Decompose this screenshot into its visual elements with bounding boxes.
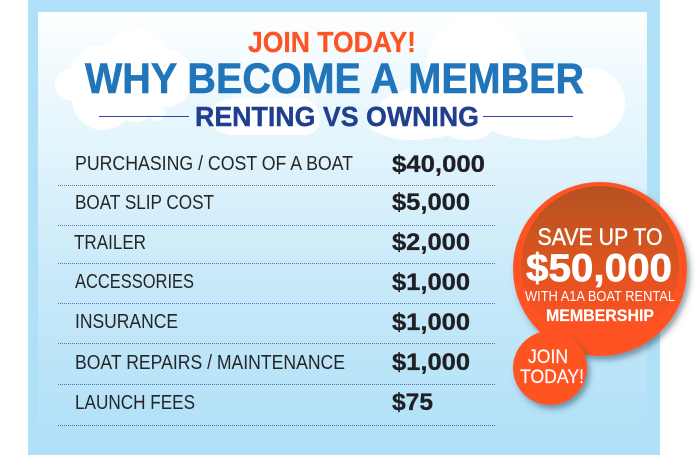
button: join today bbox=[513, 331, 587, 405]
row: accessories: ACCESSORIES bbox=[75, 271, 194, 293]
row: insurance: INSURANCE bbox=[75, 311, 178, 333]
badge: save up to $50,000: $50,000 bbox=[526, 247, 672, 290]
row: trailer bbox=[74, 229, 470, 256]
badge: save up to $50,000: MEMBERSHIP bbox=[546, 307, 654, 325]
row: purchasing: $40,000 bbox=[392, 151, 485, 178]
button: join today: JOIN bbox=[528, 347, 568, 368]
row: purchasing bbox=[75, 151, 485, 178]
subheading: renting vs owning: RENTING VS OWNING bbox=[195, 101, 479, 132]
row: accessories: $1,000 bbox=[392, 269, 470, 296]
heading: why become a member: WHY BECOME A MEMBER bbox=[85, 55, 584, 103]
row: boat repairs: BOAT REPAIRS / MAINTENANCE bbox=[75, 352, 345, 374]
row: boat slip: $5,000 bbox=[392, 189, 470, 216]
title: join today: JOIN TODAY! bbox=[248, 27, 416, 59]
row: purchasing: PURCHASING / COST OF A BOAT bbox=[75, 153, 353, 175]
clouds bbox=[55, 18, 625, 140]
row: insurance bbox=[75, 309, 470, 336]
table: cost rows bbox=[58, 151, 496, 426]
row: trailer: $2,000 bbox=[392, 229, 470, 256]
row: launch fees: $75 bbox=[392, 389, 433, 416]
badge: save up to $50,000: SAVE UP TO bbox=[538, 224, 662, 251]
row: accessories bbox=[75, 269, 470, 296]
row: launch fees bbox=[75, 389, 433, 416]
badge: save up to $50,000: WITH A1A BOAT RENTAL bbox=[525, 288, 675, 305]
button: join today: TODAY! bbox=[520, 367, 584, 388]
row: boat repairs bbox=[75, 349, 470, 376]
row: trailer: TRAILER bbox=[74, 232, 146, 254]
row: boat repairs: $1,000 bbox=[392, 349, 470, 376]
row: boat slip: BOAT SLIP COST bbox=[75, 192, 214, 214]
row: insurance: $1,000 bbox=[392, 309, 470, 336]
row: launch fees: LAUNCH FEES bbox=[75, 392, 195, 414]
badge: save up to $50,000 bbox=[513, 182, 687, 356]
row: boat slip bbox=[75, 189, 470, 216]
